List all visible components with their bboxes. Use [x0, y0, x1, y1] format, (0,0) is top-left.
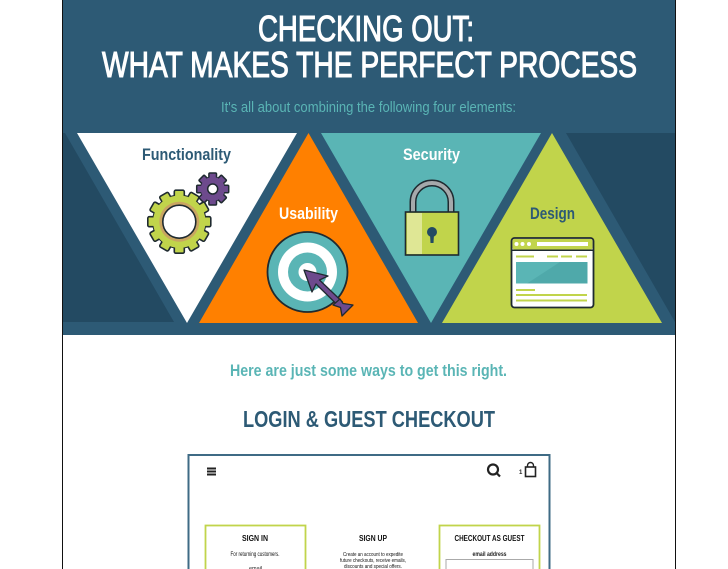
- panel: security: [321, 133, 541, 323]
- panel: usability: [199, 133, 418, 323]
- heading: design: Design: [530, 204, 575, 223]
- subtitle: It's all about combining the following four elements:: [221, 99, 516, 116]
- icon: padlock: [406, 183, 458, 255]
- section heading: LOGIN & GUEST CHECKOUT: [243, 406, 495, 432]
- title: CHECKING OUT:: [258, 8, 474, 49]
- icon: search: [488, 464, 500, 476]
- heading: usability: Usability: [279, 204, 338, 223]
- panel: sign up: future checkouts, receive emails,: [340, 558, 406, 564]
- panel: checkout as guest: email address: [472, 551, 507, 558]
- checkout mockup: [188, 455, 550, 569]
- icon: target with arrow: [268, 232, 353, 316]
- panel: sign in: [206, 526, 306, 569]
- panel: design: [442, 133, 662, 323]
- heading: security: Security: [403, 145, 460, 164]
- icon: browser window: [512, 238, 594, 308]
- panel: sign in: For returning customers.: [230, 552, 280, 558]
- panel: sign up: Create an account to expedite: [343, 552, 403, 558]
- icon: green gear: [148, 190, 211, 253]
- panel: sign up: SIGN UP: [359, 534, 388, 543]
- intro sentence: Here are just some ways to get this right.: [230, 361, 507, 380]
- icon: purple gear: [197, 173, 229, 205]
- panel: checkout as guest: [440, 526, 540, 569]
- icon: menu: [207, 468, 216, 476]
- icon: cart: 1: [519, 470, 523, 476]
- icon: cart: [519, 462, 536, 476]
- panel: functionality: [77, 133, 297, 323]
- panel: checkout as guest: CHECKOUT AS GUEST: [454, 534, 525, 543]
- panel: sign in: SIGN IN: [242, 534, 268, 543]
- header panel: [63, 0, 675, 335]
- heading: functionality: Functionality: [142, 145, 231, 164]
- panel: sign up: [340, 534, 406, 569]
- title: [102, 8, 637, 85]
